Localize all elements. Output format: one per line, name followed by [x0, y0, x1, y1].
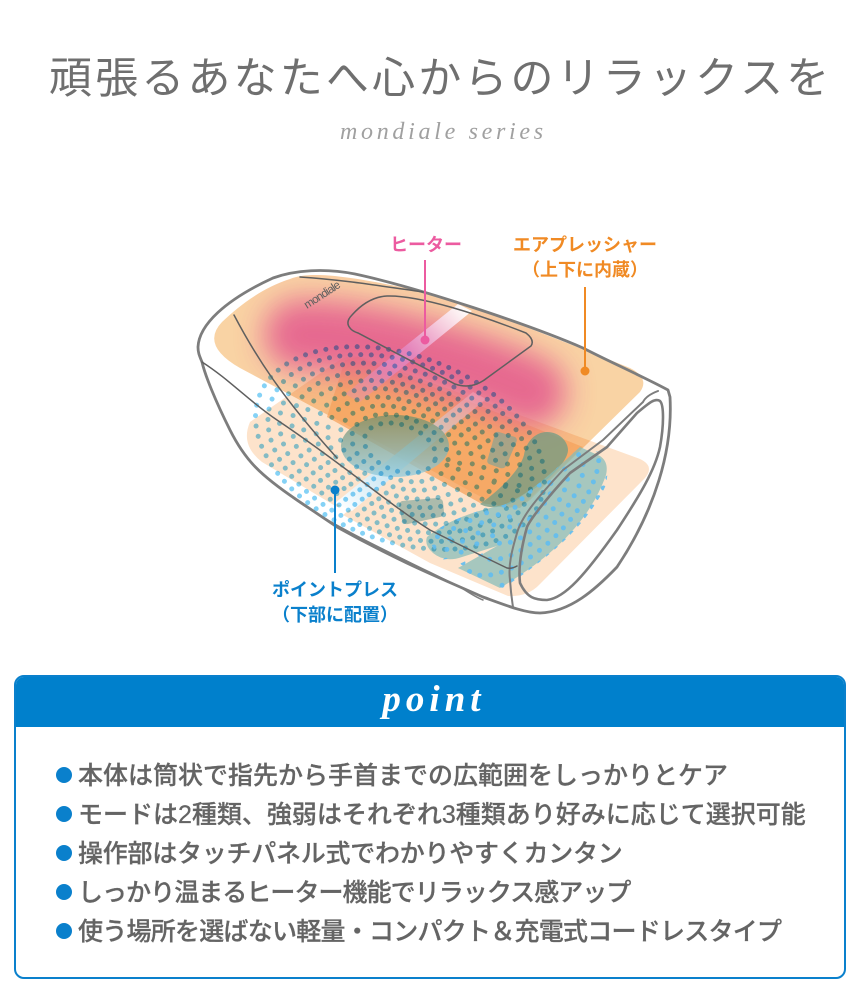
heater strip: upper	[345, 304, 472, 402]
point press: small pads	[399, 432, 517, 524]
overlap zone: orange	[327, 357, 583, 508]
leader: air pressure	[581, 287, 589, 375]
point press: bean pad	[480, 432, 568, 507]
leader: point press	[331, 486, 339, 573]
list item 3: 操作部はタッチパネル式でわかりやすくカンタン	[78, 840, 623, 868]
heater strip: lower	[335, 392, 486, 511]
panel: point	[14, 675, 846, 979]
dots: lower right cluster	[432, 451, 608, 588]
list item 4: しっかり温まるヒーター機能でリラックス感アップ	[78, 879, 630, 907]
point press: central oval	[341, 415, 449, 477]
header text: point	[382, 679, 486, 720]
label: point press: ポイントプレス	[272, 580, 398, 600]
label: heater: ヒーター	[390, 235, 462, 255]
label: air pressure	[513, 235, 657, 280]
list item 5: 使う場所を選ばない軽量・コンパクト＆充電式コードレスタイプ	[78, 918, 781, 946]
label: air pressure: エアプレッシャー	[513, 235, 657, 255]
device detail lines	[202, 277, 532, 600]
label: point press: （下部に配置）	[272, 604, 398, 624]
list item 2: モードは2種類、強弱はそれぞれ3種類あり好みに応じて選択可能	[78, 801, 806, 829]
heater: pink gradient band	[300, 335, 530, 392]
device outline	[198, 271, 670, 613]
label: point press	[272, 580, 398, 624]
label: air pressure: （上下に内蔵）	[522, 260, 648, 280]
subtitle: mondiale series	[340, 119, 547, 145]
diagram: device cutaway	[196, 260, 672, 614]
list item 1: 本体は筒状で指先から手首までの広範囲をしっかりとケア	[78, 762, 728, 790]
leader: heater	[421, 260, 429, 344]
point press: lower band pad	[426, 447, 607, 588]
lower plate: point press base	[247, 357, 649, 596]
logo on device: mondiale	[302, 279, 343, 312]
dots: upper fan	[227, 309, 573, 587]
upper panel: air pressure	[214, 275, 643, 508]
title: 頑張るあなたへ心からのリラックスを	[49, 55, 832, 103]
panel header	[14, 675, 846, 727]
